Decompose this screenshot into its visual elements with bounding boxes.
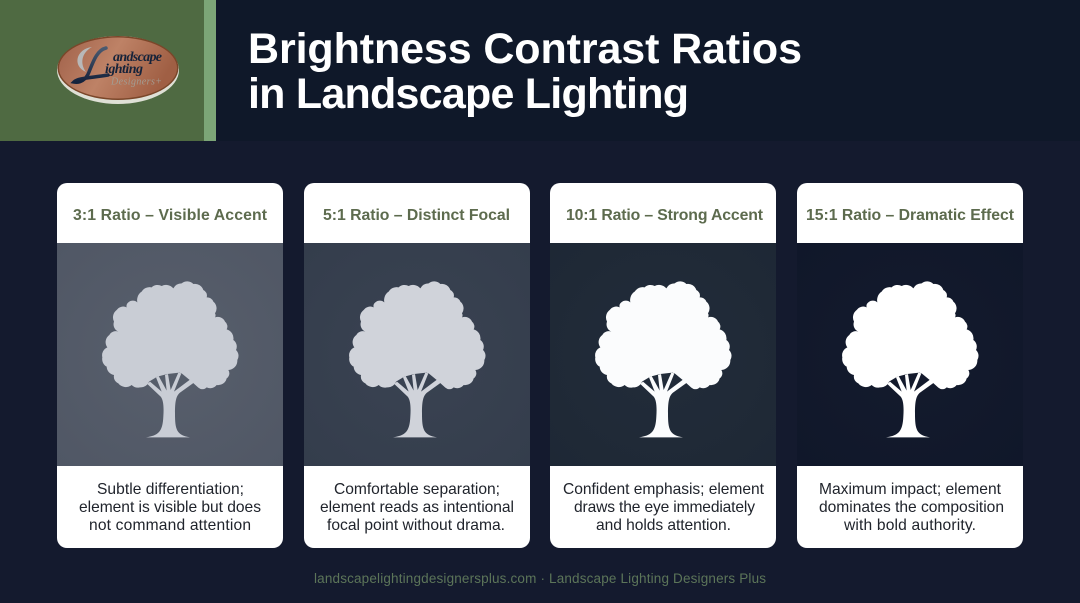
description: dominates the composition [819, 499, 1004, 516]
heading: 10:1 Ratio – Strong Accent [566, 207, 764, 224]
green logo block [0, 0, 204, 141]
card: 3:1 ratio [57, 183, 283, 548]
heading: 15:1 Ratio – Dramatic Effect [806, 207, 1015, 224]
logo: Landscape Lighting Designers Plus: Designers+ [110, 76, 162, 88]
description [79, 481, 261, 534]
heading: 5:1 Ratio – Distinct Focal [323, 207, 510, 224]
description: not command attention [89, 517, 251, 534]
contrast panel [304, 243, 530, 466]
description: Maximum impact; element [819, 481, 1002, 498]
description: Comfortable separation; [334, 481, 500, 498]
description: Confident emphasis; element [563, 481, 765, 498]
title: Brightness Contrast Ratios [248, 25, 802, 73]
description: element reads as intentional [320, 499, 514, 516]
green accent strip [204, 0, 216, 141]
description [563, 481, 765, 534]
description: and holds attention. [596, 517, 731, 534]
description [320, 481, 514, 534]
description: Subtle differentiation; [97, 481, 244, 498]
description: element is visible but does [79, 499, 261, 516]
icon: tree [102, 281, 239, 437]
heading: 3:1 Ratio – Visible Accent [73, 207, 268, 224]
header band [0, 0, 1080, 141]
title: in Landscape Lighting [248, 70, 689, 118]
logo: Landscape Lighting Designers Plus: andscape [113, 50, 162, 65]
card: 15:1 ratio [797, 183, 1023, 548]
description [819, 481, 1004, 534]
description: focal point without drama. [327, 517, 505, 534]
logo: Landscape Lighting Designers Plus: ighting [105, 62, 143, 77]
description: with bold authority. [843, 517, 976, 534]
contrast panel [57, 243, 283, 466]
card: 10:1 ratio [550, 183, 776, 548]
logo: Landscape Lighting Designers Plus [57, 36, 179, 104]
contrast panel [550, 243, 776, 466]
card: 5:1 ratio [304, 183, 530, 548]
description: draws the eye immediately [574, 499, 755, 516]
icon: tree [349, 281, 486, 437]
icon: tree [595, 281, 732, 437]
contrast panel [797, 243, 1023, 466]
footer: landscapelightingdesignersplus.com · Landscape Lighting Designers Plus [314, 571, 766, 586]
icon: tree [842, 281, 979, 437]
title [248, 25, 802, 118]
